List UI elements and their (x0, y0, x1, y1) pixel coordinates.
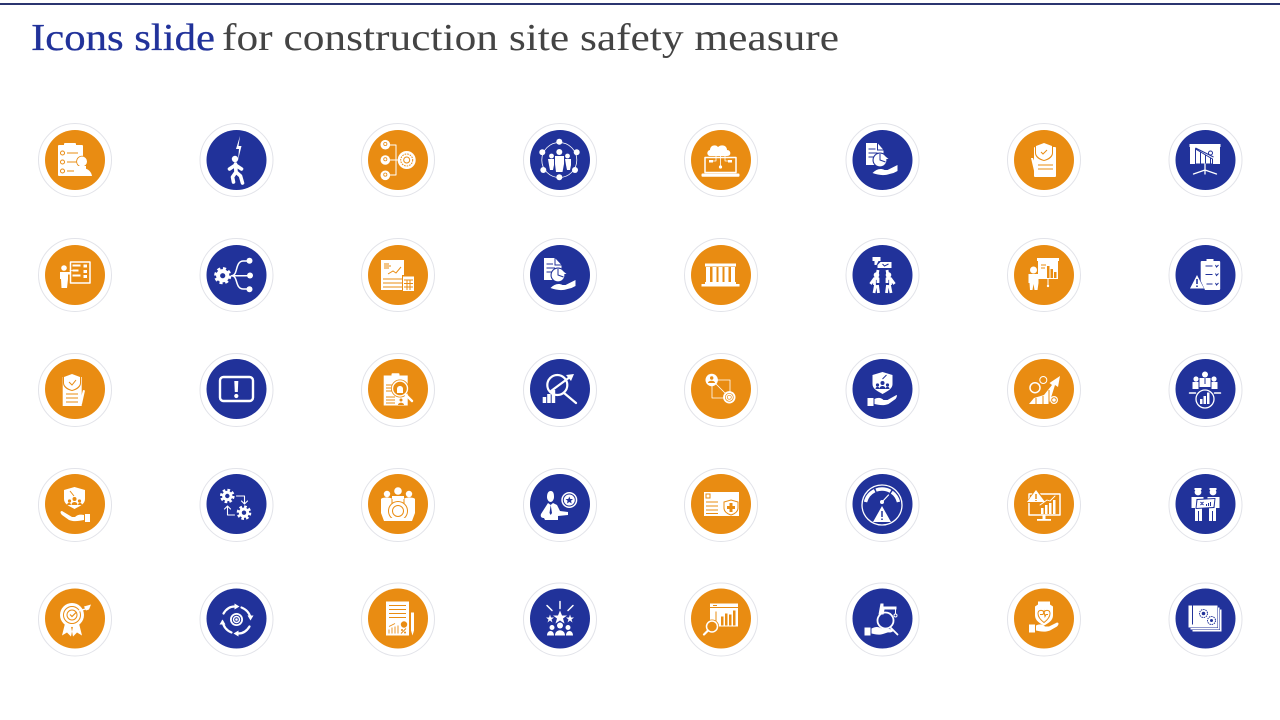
icon: network of people and target (684, 354, 758, 426)
icon: alert panel (200, 354, 273, 426)
icon: presenter with chart (1008, 238, 1080, 312)
title (31, 17, 839, 59)
icon: candidate document under magnifier (362, 354, 434, 426)
icon: signed shield document (1008, 124, 1080, 196)
icon: cloud and laptop (684, 124, 758, 196)
icon: financial report and calculator (362, 238, 434, 312)
icon: cycle around gear (200, 583, 273, 656)
icon: declining chart on board (1169, 124, 1242, 196)
icon: gears and rising arrow (1008, 354, 1080, 426)
icon: team shield in hand (846, 354, 919, 426)
icon: health shield in hand (1008, 583, 1080, 656)
icon: award target (38, 583, 112, 656)
title: Icons slide (31, 17, 215, 59)
icon: risk gauge (846, 468, 919, 542)
icon: chart window with magnifier (684, 583, 758, 656)
icon: star-rated team (524, 583, 596, 656)
icon: team shield in hand (38, 468, 112, 542)
icon: crane and magnifier in hand (846, 583, 919, 656)
icon: warning monitor with chart (1008, 468, 1080, 542)
icon: report and pie in hand (524, 238, 596, 312)
icon: gears with process arrows (200, 468, 273, 542)
icon: businessman with badge (524, 468, 596, 542)
icon: presenter with checklist board (38, 238, 112, 312)
icon: finance document and pencil (362, 583, 434, 656)
icon: insurance card with shield (684, 468, 758, 542)
icon: two engineers with plan (1169, 468, 1242, 542)
icon: people connected to gear (362, 124, 434, 196)
icon: magnifier over growth bars (524, 354, 596, 426)
title: for construction site safety measure (222, 17, 839, 59)
icon: two people joining puzzle (846, 238, 919, 312)
icon: stacked pages with gears (1169, 583, 1242, 656)
icon: signed safety document (38, 354, 112, 426)
icon: safety checklist with warning (1169, 238, 1242, 312)
icon: checklist with person (38, 124, 112, 196)
icon: gear with branches (200, 238, 273, 312)
icon: pillars (684, 238, 758, 312)
icon: lightning strike and running person (200, 124, 273, 196)
icon: team network ring (524, 124, 596, 196)
icon grid (38, 124, 1242, 656)
icon: report and pie in hand (846, 124, 919, 196)
icon: team around chart (1169, 354, 1242, 426)
icon: team with gear (362, 468, 434, 542)
